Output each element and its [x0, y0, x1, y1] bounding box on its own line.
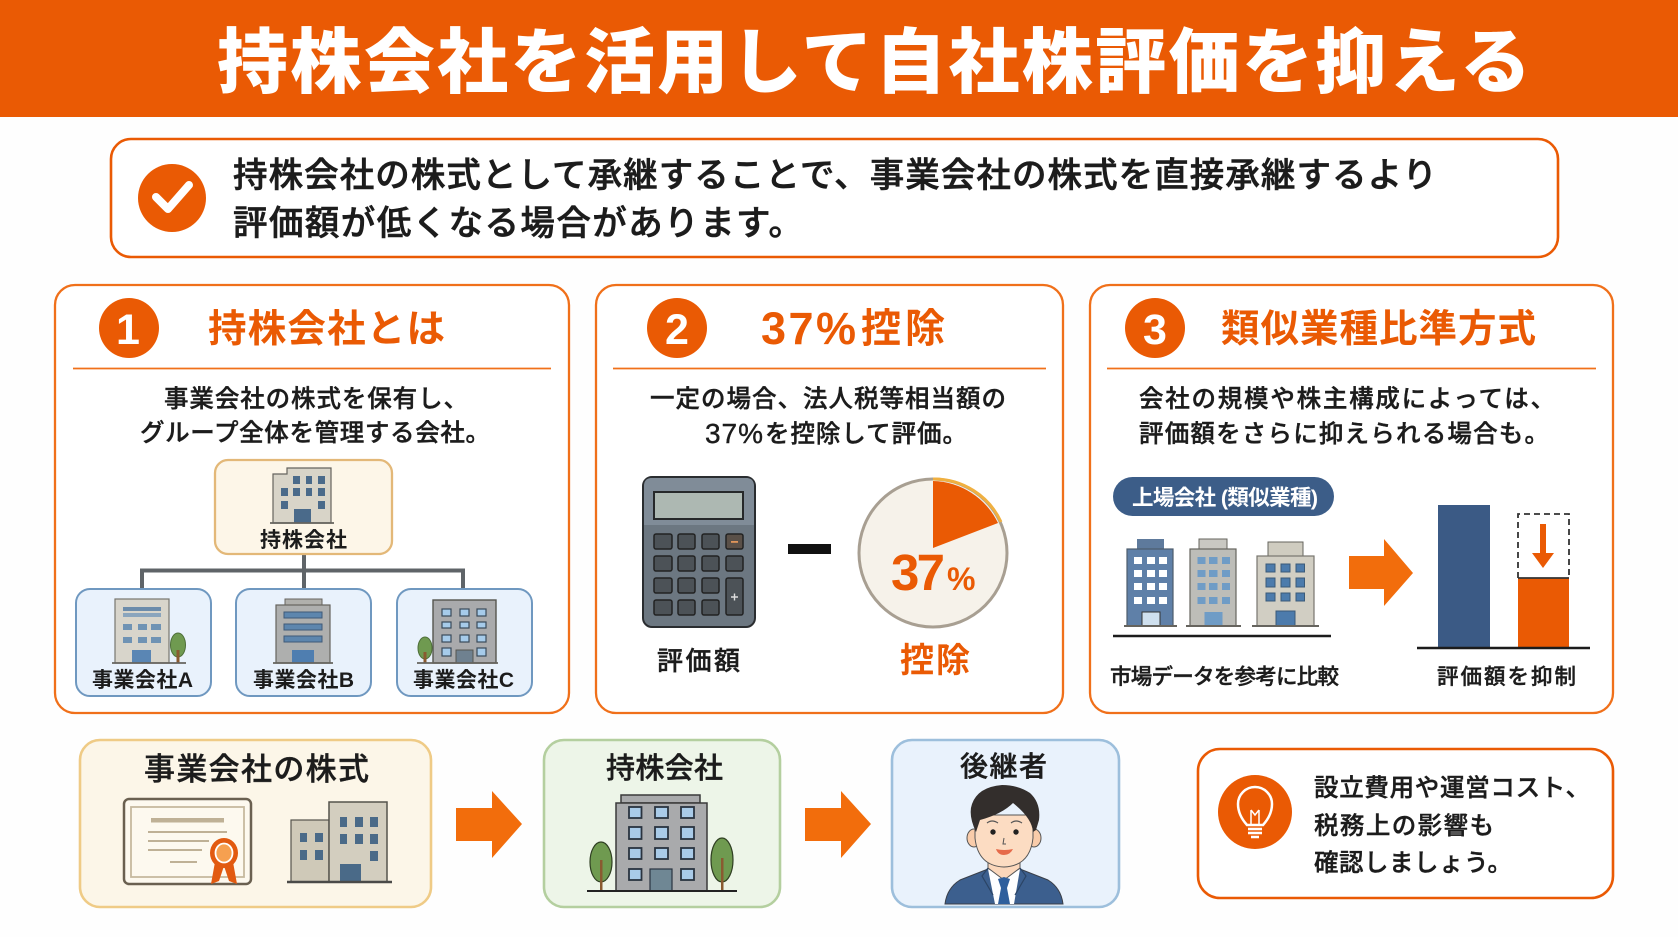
icon: building C	[417, 600, 498, 663]
note text	[1314, 774, 1590, 877]
note: costs callout	[1198, 749, 1613, 898]
number badge 1	[99, 298, 159, 358]
number badge 2	[647, 298, 707, 358]
arrow	[456, 791, 522, 858]
arrow	[1349, 539, 1413, 606]
icon: holding company building	[587, 795, 737, 891]
panel description	[1139, 385, 1555, 448]
panel heading: 持株会社とは	[208, 308, 445, 351]
label: 評価額	[657, 646, 740, 676]
number badge 3: 3	[1143, 306, 1167, 354]
subsidiary A box	[76, 589, 211, 696]
flow: 後継者	[892, 740, 1119, 907]
flow: 事業会社の株式	[80, 740, 431, 907]
panel description	[140, 385, 490, 447]
icon: listed buildings	[1113, 539, 1331, 636]
panel heading: 類似業種比準方式	[1221, 308, 1536, 351]
icon: building B	[273, 599, 333, 663]
heading: 事業会社の株式	[144, 752, 369, 787]
heading: 持株会社	[606, 752, 723, 785]
label: 事業会社B	[253, 668, 354, 692]
chart: valuation bars	[1417, 505, 1590, 648]
note text: 税務上の影響も	[1314, 812, 1494, 840]
summary text	[233, 157, 1437, 243]
number badge 1: 1	[116, 306, 140, 354]
flow: 持株会社	[544, 740, 780, 907]
icon: calculator	[643, 477, 755, 627]
minus sign	[788, 544, 831, 554]
chart: 37% pie: 37	[891, 544, 945, 601]
icon: down arrow	[1532, 524, 1554, 568]
icon: light bulb	[1218, 775, 1292, 849]
label: 市場データを参考に比較	[1110, 664, 1339, 689]
summary text: 持株会社の株式として承継することで、事業会社の株式を直接承継するより	[233, 157, 1437, 195]
heading: 後継者	[960, 751, 1047, 782]
chart: 37% pie	[859, 479, 1007, 627]
note text: 設立費用や運営コスト、	[1314, 774, 1590, 802]
panel description: グループ全体を管理する会社。	[140, 419, 490, 447]
icon: successor portrait	[945, 785, 1063, 904]
panel description: 37%	[705, 418, 763, 449]
subsidiary B box	[236, 589, 371, 696]
panel description: 一定の場合、法人税等相当額の	[650, 385, 1006, 413]
panel description: 事業会社の株式を保有し、	[164, 385, 468, 413]
label: 評価額を抑制	[1437, 665, 1576, 689]
label: 事業会社C	[413, 668, 514, 692]
panel heading: 37%	[761, 303, 856, 354]
panel: 持株会社とは	[55, 285, 569, 713]
title banner	[0, 0, 1678, 117]
number badge 2: 2	[665, 306, 689, 354]
number badge 3	[1125, 298, 1185, 358]
panel description: 評価額をさらに抑えられる場合も。	[1139, 420, 1549, 448]
holding company box	[215, 460, 392, 554]
summary text: 評価額が低くなる場合があります。	[233, 205, 803, 243]
chart: 37% pie: %	[947, 561, 975, 597]
note text: 確認しましょう。	[1314, 849, 1512, 877]
label: 事業会社A	[92, 668, 193, 692]
icon: holding building	[270, 468, 334, 523]
panel: 類似業種比準方式	[1090, 285, 1613, 713]
label: 控除	[900, 642, 970, 680]
icon: company building	[287, 802, 392, 882]
pill: listed companies	[1113, 477, 1334, 516]
arrow	[805, 791, 871, 858]
panel: 37%控除	[596, 285, 1063, 713]
title: 持株会社を活用して自社株評価を抑える	[217, 24, 1531, 103]
icon: check mark	[138, 164, 206, 232]
panel description	[650, 385, 1006, 449]
panel heading	[761, 303, 945, 354]
icon: stock certificate	[124, 799, 251, 884]
pill: listed companies: 上場会社 (類似業種)	[1132, 486, 1318, 510]
subsidiary C box	[397, 589, 532, 696]
panel heading: 控除	[861, 307, 945, 351]
panel description: 会社の規模や株主構成によっては、	[1139, 385, 1555, 413]
panel description: を控除して評価。	[765, 420, 967, 448]
label: 持株会社	[260, 529, 347, 552]
summary callout	[111, 139, 1558, 257]
org chart connectors	[142, 554, 463, 589]
icon: building A	[112, 599, 186, 663]
